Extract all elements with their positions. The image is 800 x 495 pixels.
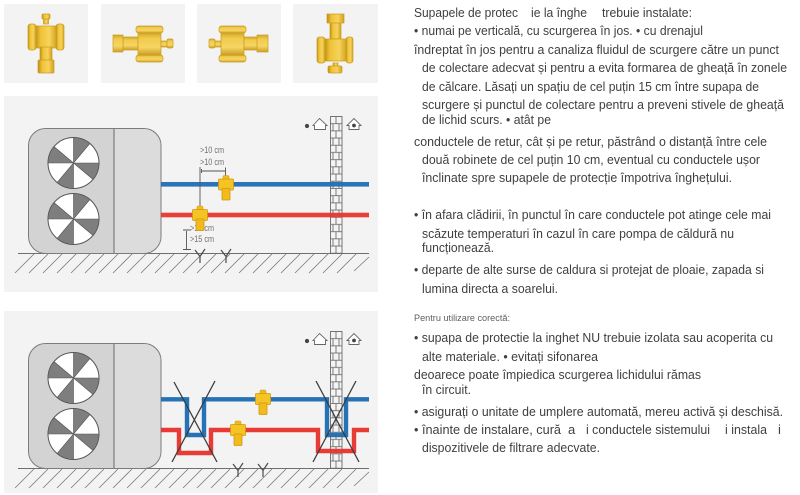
text block: correct use list: • înainte de instalare, cură bbox=[414, 422, 562, 437]
distance dimension lines: >15 cm bbox=[190, 234, 214, 245]
text block: correct use list: • asigurați o unitate de umplere automată, mereu activă și deschisă. bbox=[414, 404, 783, 419]
text block: location requirements: • departe de alte surse de caldura si protejat de ploaie, zapada si bbox=[414, 262, 764, 277]
text block: correct use list bbox=[414, 330, 783, 455]
text block: installation requirements: de lichid scurs. • atât pe bbox=[422, 112, 551, 127]
text block: correct use list: i bbox=[778, 422, 781, 437]
distance dimension lines: >10 cm bbox=[200, 145, 224, 156]
text block: location requirements: funcționează. bbox=[422, 240, 494, 255]
photo: valve, stem down bbox=[4, 4, 88, 83]
drain funnel bbox=[221, 249, 231, 263]
text block: location requirements: lumina directa a soarelui. bbox=[422, 281, 558, 296]
text block: installation requirements: conductele de retur, cât și pe retur, păstrând o distanță între cele bbox=[414, 134, 767, 149]
photo: valve, horizontal left bbox=[101, 4, 185, 83]
text block: installation requirements: de călcare. Lăsați un spațiu de cel puțin 15 cm între supapa de bbox=[422, 79, 759, 94]
drain funnel bbox=[258, 463, 268, 477]
text block: installation requirements: îndreptat în jos pentru a canaliza fluidul de scurgere către un punct bbox=[413, 42, 779, 57]
text block: correct use list: • supapa de protectie la inghet NU trebuie izolata sau acoperita cu bbox=[414, 330, 773, 345]
text block: correct use list: deoarece poate împiedica scurgerea lichidului rămas bbox=[414, 367, 701, 382]
text block: correct use list: a bbox=[568, 422, 576, 437]
text block: installation requirements: două robinete de cel puțin 10 cm, eventual cu conductele ușor bbox=[422, 152, 761, 167]
brick wall bbox=[330, 332, 342, 468]
text block: installation requirements: scurgere și punctul de colectare pentru a preveni stivele de gheață bbox=[422, 97, 785, 112]
heading: correct use: Pentru utilizare corectă: bbox=[414, 313, 510, 323]
crossed-out right siphon bbox=[313, 381, 359, 462]
valve on red pipe bbox=[230, 421, 246, 446]
text block: location requirements: scăzute temperaturi în cazul în care pompa de căldură nu bbox=[422, 226, 734, 241]
text block: location requirements: • în afara clădirii, în punctul în care conductele pot atinge cele mai bbox=[414, 207, 771, 222]
ground hatching bbox=[15, 468, 369, 488]
heat pump outdoor unit bbox=[28, 344, 161, 468]
text block: installation requirements: trebuie instalate: bbox=[602, 5, 692, 20]
text block: installation requirements bbox=[413, 5, 787, 185]
text block: correct use list: i instala bbox=[725, 422, 768, 437]
photo: valve, horizontal right bbox=[197, 4, 281, 83]
text block: location requirements bbox=[414, 207, 771, 296]
blue pipe with siphons bbox=[161, 399, 369, 435]
text block: installation requirements: înclinate spre supapele de protecție împotriva înghețului. bbox=[421, 170, 732, 185]
blue return pipe bbox=[161, 182, 369, 187]
valve on blue pipe bbox=[218, 176, 234, 200]
drain funnel bbox=[233, 463, 243, 477]
indoor and outdoor house icons bbox=[305, 118, 361, 130]
text block: correct use list: i conductele sistemului bbox=[586, 422, 710, 437]
photo: valve, stem up bbox=[293, 4, 378, 83]
product photos row bbox=[4, 4, 378, 83]
valve on red pipe bbox=[192, 206, 208, 230]
ground hatching bbox=[15, 254, 369, 273]
distance dimension lines: >10 cm bbox=[200, 157, 224, 168]
text block: installation requirements: ie la înghe bbox=[531, 5, 587, 20]
distance dimension lines bbox=[183, 145, 226, 250]
text block: correct use list: în circuit. bbox=[421, 382, 471, 397]
drain funnel bbox=[195, 249, 205, 263]
heat pump outdoor unit bbox=[28, 128, 161, 254]
red flow pipe bbox=[161, 213, 369, 217]
indoor and outdoor house icons bbox=[305, 334, 361, 344]
text block: installation requirements: Supapele de protec bbox=[414, 5, 518, 20]
brick wall bbox=[330, 116, 342, 254]
text block: correct use list: alte materiale. • evitați sifonarea bbox=[422, 349, 599, 364]
valve on blue pipe bbox=[256, 390, 270, 414]
distance dimension lines: >15 cm bbox=[190, 223, 214, 234]
text block: installation requirements: • numai pe verticală, cu scurgerea în jos. • cu drenajul bbox=[414, 23, 703, 38]
crossed-out left siphon bbox=[172, 381, 217, 462]
text block: correct use list: dispozitivele de filtrare adecvate. bbox=[422, 440, 600, 455]
panel: correct installation diagram bbox=[4, 96, 378, 292]
red pipe with siphons bbox=[161, 430, 369, 453]
text block: installation requirements: de colectare adecvat și pentru a evita formarea de gheață în zonele bbox=[422, 60, 787, 75]
panel: incorrect installation diagram bbox=[4, 311, 378, 493]
